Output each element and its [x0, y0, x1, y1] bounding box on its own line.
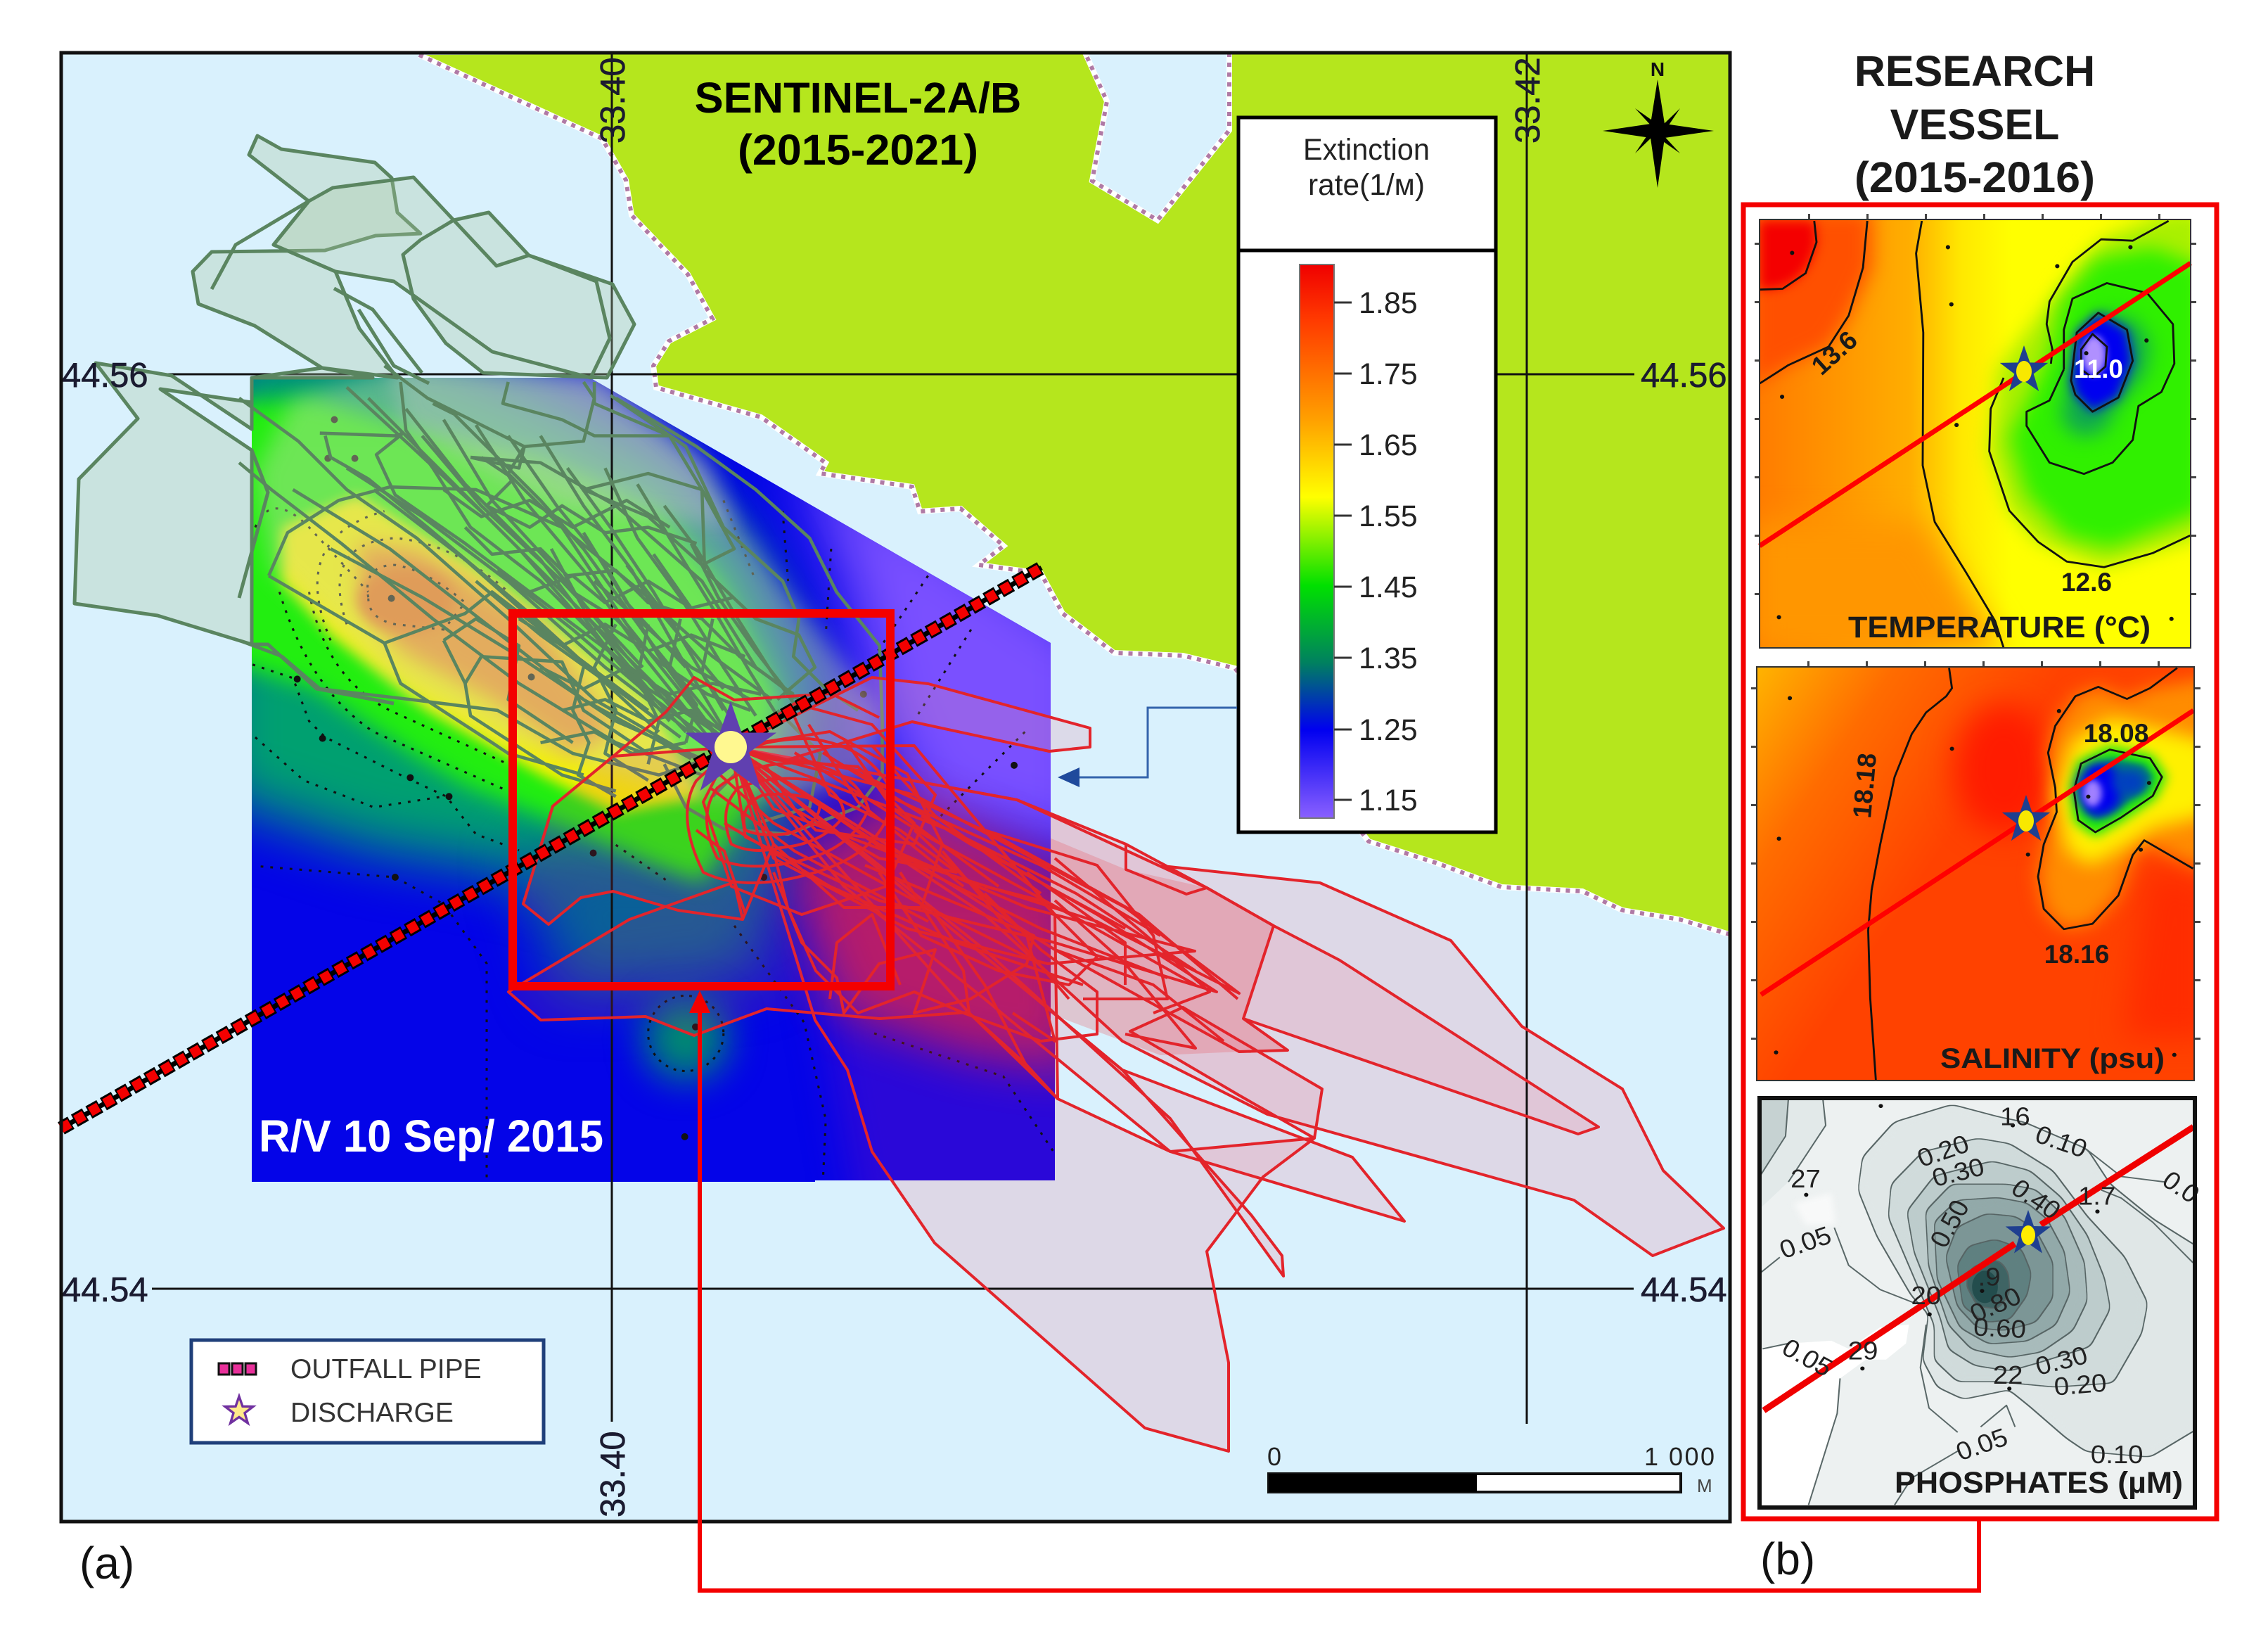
contours [1868, 668, 2193, 1081]
phosphate contour labels: 0.60 [1973, 1312, 2027, 1344]
phosphate contour labels: .9 [1978, 1263, 2001, 1291]
arrow: red connector [689, 990, 1979, 1591]
colour bar labels: 1.45 [1359, 571, 1418, 604]
phosphate contour labels: 0.20 [1913, 1129, 1973, 1173]
raster: extinction rate field [252, 378, 1055, 1182]
legend: symbols [191, 1340, 544, 1443]
grid labels: 44.54 [1641, 1271, 1727, 1309]
grid labels: 44.56 [1641, 357, 1727, 395]
tick marks [1757, 217, 2193, 648]
phosphate contour labels: 0.10 [2091, 1440, 2144, 1469]
phosphates title: PHOSPHATES (µM) [1895, 1466, 2183, 1500]
phosphate contour labels: 1.7 [2078, 1182, 2115, 1210]
icon: station star [2002, 795, 2050, 841]
salinity value labels: 18.08 [2084, 719, 2148, 748]
panel label (b): (b) [1760, 1534, 1815, 1584]
legend units: rate(1/м) [1308, 168, 1425, 202]
phosphate contour labels: 0.20 [2053, 1368, 2108, 1401]
heading: Sentinel: SENTINEL-2A/B [695, 74, 1021, 122]
heading: research vessel: VESSEL [1890, 101, 2059, 148]
colour bar labels: 1.15 [1359, 784, 1418, 817]
heading: research vessel: (2015-2016) [1854, 153, 2095, 201]
phosphate contour labels: 27 [1790, 1164, 1821, 1193]
salinity value labels: 18.16 [2044, 940, 2109, 969]
grid labels: 44.54 [62, 1271, 148, 1309]
colour bar labels: 1.85 [1359, 286, 1418, 320]
grid labels: 33.40 [594, 1431, 632, 1517]
phosphate contour labels: 0.05 [1776, 1221, 1835, 1264]
grid labels: 44.56 [62, 357, 148, 395]
phosphate contour labels: 0.0 [2157, 1165, 2205, 1209]
outer green plumes [75, 136, 634, 703]
grid labels [62, 57, 1727, 1517]
icon: north arrow: N [1651, 58, 1665, 80]
land [419, 53, 1731, 935]
outfall pipe [61, 568, 1042, 1128]
sea background [61, 53, 1730, 1522]
scale bar [1267, 1442, 1715, 1496]
phosphate contour labels: 0.50 [1923, 1195, 1975, 1252]
arrow: legend to raster [1058, 708, 1237, 787]
contours [1760, 221, 2190, 648]
heading: Sentinel [695, 74, 1021, 174]
phosphate contour labels: 16 [2000, 1102, 2030, 1130]
map frame [61, 53, 1730, 1522]
grid lines [152, 53, 1634, 1424]
salinity title: SALINITY (psu) [1940, 1043, 2165, 1074]
red plume fills [731, 747, 1724, 1451]
grid labels: 33.42 [1509, 57, 1547, 144]
phosphate contour labels: 0.10 [2032, 1119, 2091, 1163]
phosphate contour labels: 0.05 [1777, 1332, 1838, 1382]
scale bar: 0 [1267, 1442, 1281, 1471]
panel: map (a) [61, 53, 1731, 1522]
phosphate contour labels: 0.30 [2032, 1340, 2091, 1381]
icon: station star [2006, 1210, 2051, 1254]
panel label (a): (a) [79, 1538, 134, 1588]
tick marks [1754, 664, 2198, 1081]
pipe label: OUTFALL PIPE [290, 1354, 482, 1384]
temperature value labels: 12.6 [2061, 568, 2112, 597]
salinity value labels [1847, 719, 2148, 969]
colour bar labels [1359, 286, 1418, 817]
chart: temperature [1751, 211, 2205, 652]
colour bar labels: 1.65 [1359, 428, 1418, 462]
phosphate contour labels: 0.40 [2006, 1173, 2066, 1225]
heading: research vessel [1854, 47, 2095, 201]
icon: north arrow [1603, 58, 1714, 188]
profile line [1760, 263, 2191, 546]
chart: salinity [1754, 664, 2210, 1081]
phosphate contour labels: 0.80 [1965, 1281, 2025, 1328]
scale bar: M [1697, 1475, 1712, 1496]
phosphate contour labels [1776, 1102, 2205, 1469]
colour bar labels: 1.55 [1359, 499, 1418, 533]
phosphate contour labels: 29 [1848, 1337, 1878, 1365]
colour bar labels: 1.75 [1359, 357, 1418, 391]
panel: research vessel frame [1743, 205, 2217, 1519]
chart: phosphates [1759, 1098, 2222, 1508]
profile line [1761, 710, 2193, 995]
extinction legend panel [1238, 117, 1496, 832]
icon: discharge symbol [225, 1396, 253, 1423]
red plume outlines (2015-2021 south-east) [508, 677, 1724, 1451]
phosphate contour labels: 0.30 [1929, 1152, 1987, 1192]
icon: pipe symbol [219, 1363, 256, 1375]
icon: discharge star [685, 701, 776, 791]
heading: Sentinel: (2015-2021) [738, 126, 978, 174]
red highlight box [513, 613, 890, 986]
scale bar: 1 000 [1644, 1442, 1715, 1471]
profile line [1764, 1127, 2193, 1410]
heading: research vessel: RESEARCH [1854, 47, 2095, 95]
temperature value labels: 11.0 [2074, 355, 2123, 383]
temperature title: TEMPERATURE (°C) [1848, 611, 2151, 644]
temperature value labels [1806, 325, 2123, 597]
salinity value labels: 18.18 [1847, 752, 1882, 820]
discharge label: DISCHARGE [290, 1398, 454, 1428]
phosphate contour labels: 0.05 [1952, 1422, 2011, 1466]
temperature value labels: 13.6 [1806, 325, 1863, 381]
green plume polygons (2015-2021 north-west) [75, 136, 883, 834]
grid labels: 33.40 [594, 57, 632, 144]
dense green plume lines [239, 366, 883, 834]
colour bar [1300, 265, 1334, 818]
colour bar labels: 1.35 [1359, 642, 1418, 675]
colour bar labels: 1.25 [1359, 713, 1418, 747]
phosphate contour labels: 20 [1911, 1281, 1941, 1310]
legend heading: Extinction [1303, 133, 1430, 167]
raster date label: R/V 10 Sep/ 2015 [259, 1111, 603, 1161]
phosphate contour labels: 22 [1993, 1360, 2023, 1389]
icon: station star [2000, 345, 2048, 391]
